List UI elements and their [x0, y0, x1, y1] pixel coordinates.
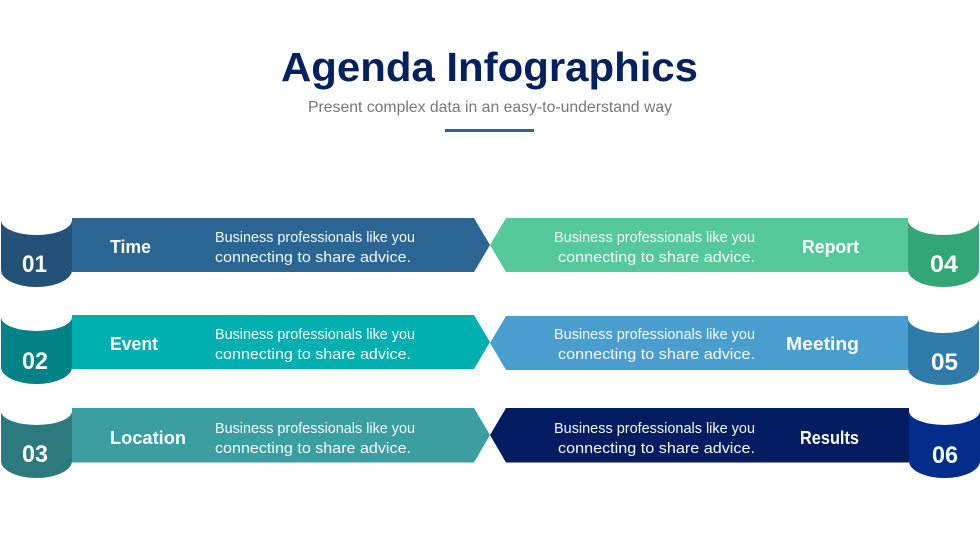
cylinder: 04: [908, 220, 979, 287]
description: connecting to share advice.: [558, 346, 755, 363]
number: 03: 03: [22, 441, 48, 468]
subtitle: Present complex data in an easy-to-understand way: [308, 99, 672, 116]
description: connecting to share advice.: [215, 440, 411, 457]
panel: 06 Results: [490, 408, 980, 478]
cylinder: 02: [1, 317, 72, 384]
description: [554, 420, 755, 457]
description: Business professionals like you: [215, 229, 415, 246]
title: Agenda Infographics: [281, 44, 698, 90]
band: Location: [72, 408, 490, 462]
number: 02: 02: [22, 348, 48, 375]
cylinder: 01: [1, 220, 72, 287]
label: Report: Report: [802, 237, 859, 257]
description: Business professionals like you: [554, 326, 755, 343]
label: Event: Event: [110, 334, 158, 354]
title underline: [445, 129, 534, 132]
description: [554, 326, 755, 363]
number: 05: 05: [931, 349, 958, 376]
panel: 02 Event: [1, 315, 490, 384]
band: Report: [490, 218, 908, 272]
description: [554, 229, 755, 266]
description: connecting to share advice.: [558, 440, 755, 457]
panel: 03 Location: [1, 408, 490, 478]
description: Business professionals like you: [554, 420, 755, 437]
cylinder: 05: [908, 318, 979, 385]
panel: 05 Meeting: [490, 316, 979, 385]
label: Location: Location: [110, 428, 186, 448]
label: Results: Results: [800, 428, 859, 448]
number: 01: 01: [22, 251, 47, 278]
band: Results: [490, 408, 909, 462]
panel: 01 Time: [1, 218, 490, 287]
band: Event: [72, 315, 490, 369]
description: Business professionals like you: [215, 326, 415, 343]
panel: 04 Report: [490, 218, 979, 287]
description: connecting to share advice.: [558, 249, 755, 266]
label: Meeting: Meeting: [786, 334, 859, 354]
description: connecting to share advice.: [215, 249, 411, 266]
description: Business professionals like you: [215, 420, 415, 437]
description: Business professionals like you: [554, 229, 755, 246]
description: [215, 420, 415, 457]
description: [215, 229, 415, 266]
number: 06: 06: [932, 442, 958, 469]
band: Time: [72, 218, 490, 272]
description: connecting to share advice.: [215, 346, 411, 363]
description: [215, 326, 415, 363]
band: Meeting: [490, 316, 908, 370]
cylinder: 03: [1, 411, 72, 478]
number: 04: 04: [930, 251, 959, 278]
label: Time: Time: [110, 237, 151, 257]
cylinder: 06: [909, 411, 980, 478]
